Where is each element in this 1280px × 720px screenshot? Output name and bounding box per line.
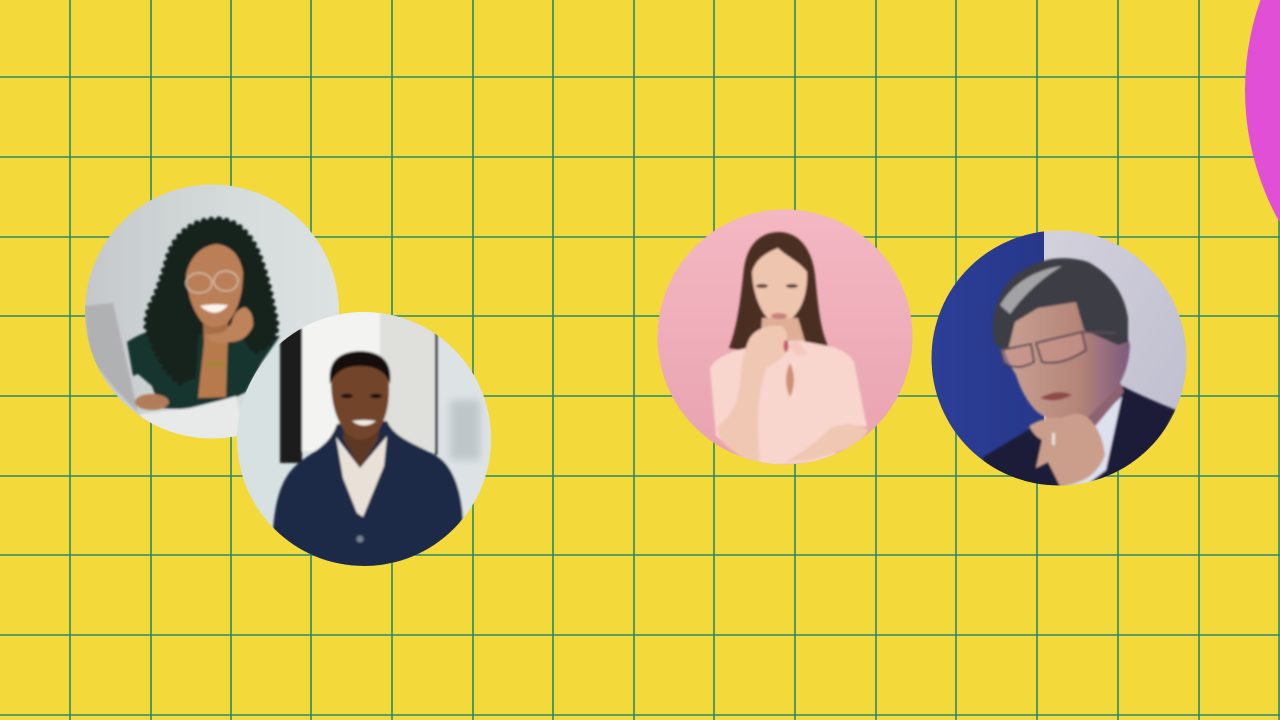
grey panel	[380, 311, 436, 451]
neck	[343, 425, 380, 468]
blue backdrop	[930, 230, 1044, 486]
face	[1000, 293, 1130, 422]
hand on chin	[1029, 414, 1105, 486]
hand under chin	[206, 307, 253, 343]
button	[356, 536, 364, 542]
grey hair	[993, 258, 1128, 350]
bright window	[436, 335, 491, 522]
long brown hair	[729, 232, 828, 352]
collar	[788, 341, 806, 356]
dark suit	[983, 386, 1176, 490]
portrait: woman with curly hair	[84, 184, 340, 440]
laptop	[84, 303, 138, 412]
mouth	[1040, 392, 1072, 400]
smile	[200, 304, 228, 313]
portrait: woman on pink background	[657, 209, 913, 466]
white column	[302, 311, 380, 451]
neck	[760, 316, 806, 342]
dark column	[280, 328, 302, 463]
glasses temple	[1082, 332, 1116, 333]
white desk items	[140, 396, 245, 440]
arm	[198, 332, 228, 398]
hair	[330, 351, 390, 384]
glasses	[1001, 332, 1086, 367]
face	[752, 248, 807, 326]
green top	[127, 328, 280, 410]
window frame	[435, 330, 438, 455]
hair highlight	[1000, 266, 1062, 314]
shirt	[336, 436, 387, 517]
ring	[1052, 433, 1055, 445]
eyes	[756, 284, 798, 288]
pink blouse	[710, 340, 867, 466]
portrait: man in navy cardigan	[236, 311, 492, 570]
shirt	[1060, 396, 1122, 486]
right forearm	[785, 424, 868, 462]
magenta circle at top right	[1245, 0, 1280, 360]
hand on keyboard	[135, 394, 169, 410]
neck	[203, 320, 228, 345]
fingernails	[784, 340, 788, 352]
curly hair	[146, 219, 277, 384]
face	[186, 244, 243, 327]
portrait: man with glasses	[930, 230, 1188, 490]
eyes	[341, 394, 382, 398]
neck	[1060, 370, 1124, 430]
navy cardigan	[273, 421, 463, 570]
left arm and hand	[718, 326, 788, 463]
lips	[771, 313, 787, 319]
keyhole	[786, 363, 794, 397]
head	[331, 354, 389, 440]
smile	[352, 420, 376, 426]
glasses	[186, 271, 238, 293]
watch	[205, 361, 226, 367]
